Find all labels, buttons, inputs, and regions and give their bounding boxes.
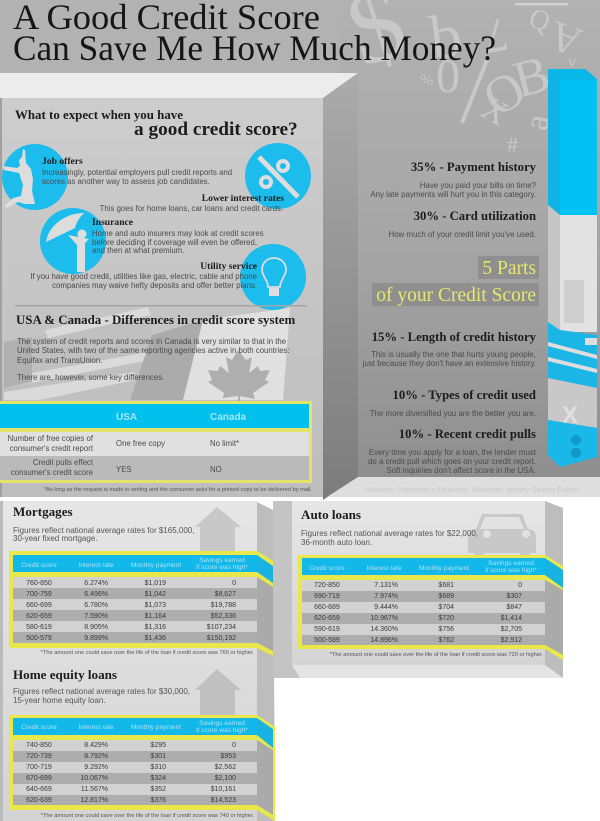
table: USA vs Canada: YES bbox=[116, 465, 132, 474]
text: 15 percent length of credit history: 15% - Length of credit history bbox=[372, 330, 537, 344]
table: mortgage rates: 620-659 bbox=[26, 613, 52, 620]
text: insurance: Home and auto insurers may look at credit scores bbox=[92, 229, 264, 238]
text: mortgages description: 30-year fixed mortgage. bbox=[13, 534, 98, 543]
table: mortgage rates: $1,436 bbox=[145, 635, 166, 642]
table: auto loan rates: Monthly payment bbox=[419, 565, 469, 572]
table: auto loan rates: $720 bbox=[438, 615, 454, 622]
table: auto loan rates: 620-659 bbox=[314, 615, 340, 622]
table: auto loan rates: 0 bbox=[518, 582, 522, 589]
table: auto loan rates: $847 bbox=[506, 604, 522, 611]
text: utility service bbox=[30, 261, 258, 290]
text: sources: Sources: Foreigner's Finances, Bankrate, Money Saving Expert bbox=[365, 485, 580, 494]
table: home equity rates: 700-719 bbox=[26, 764, 52, 771]
text: 10 percent types of credit used: The more diversified you are the better you are. bbox=[370, 409, 536, 418]
heading: what to expect: What to expect when you have bbox=[15, 108, 183, 122]
text: auto description: Figures reflect national average rates for $22,000, bbox=[301, 529, 478, 538]
panel: mortgages bbox=[9, 504, 275, 657]
text: 10 percent recent credit pulls: Soft inquiries don't affect score in the USA. bbox=[386, 466, 536, 475]
table: auto loan rates: $704 bbox=[438, 604, 454, 611]
text: utility service: companies may waive hefty deposits and offer better plans. bbox=[52, 281, 257, 290]
text: 35 percent payment history bbox=[370, 160, 537, 199]
table: home equity rates: 720-739 bbox=[26, 753, 52, 760]
table: home equity rates: $2,100 bbox=[215, 775, 236, 782]
table: home equity rates: 640-669 bbox=[26, 786, 52, 793]
text: insurance: and then at what premium. bbox=[92, 246, 184, 255]
table: auto loan rates: $1,414 bbox=[501, 615, 522, 622]
text: 35 percent payment history: Any late payments will hurt you in this category. bbox=[370, 190, 536, 199]
table: auto loan rates: 10.967% bbox=[370, 615, 398, 622]
table: home equity rates: Monthly payment bbox=[131, 724, 181, 731]
table: USA vs Canada: One free copy bbox=[116, 439, 165, 448]
table: home equity rates: 670-699 bbox=[26, 775, 52, 782]
table: USA vs Canada: USA bbox=[116, 412, 137, 423]
footnote: auto loans: *The amount one could save over the life of the loan if credit score was 720 or higher. bbox=[330, 652, 543, 658]
table: mortgage rates: $150,192 bbox=[207, 635, 236, 642]
table: USA vs Canada: consumer's credit score bbox=[11, 468, 93, 477]
decorative background letters: v bbox=[568, 54, 576, 71]
image: US flag bbox=[4, 307, 152, 400]
text: 10 percent recent credit pulls: 10% - Recent credit pulls bbox=[399, 427, 536, 441]
segment: 30 percent white bbox=[548, 205, 597, 332]
table: mortgage rates: 6.496% bbox=[84, 591, 108, 598]
table: mortgage rates: 660-699 bbox=[26, 602, 52, 609]
table: home equity rates: 10.067% bbox=[80, 775, 108, 782]
table: home equity rates: $10,161 bbox=[211, 786, 236, 793]
text: USA Canada intro: Equifax and TransUnion. bbox=[17, 356, 102, 365]
table: mortgage rates: Interest rate bbox=[78, 562, 114, 569]
table: home equity rates: if score was high* bbox=[196, 727, 248, 734]
heading: auto loans: Auto loans bbox=[301, 507, 361, 522]
table: USA vs Canada: Credit pulls effect bbox=[33, 458, 94, 467]
table: home equity rates: 8.792% bbox=[84, 753, 108, 760]
table: home equity rates: 8.429% bbox=[84, 742, 108, 749]
text: 15 percent length of credit history: just because they don't have an extensive history. bbox=[362, 359, 536, 368]
table: auto loan rates: 9.444% bbox=[374, 604, 398, 611]
table: auto loan rates: 690-719 bbox=[314, 593, 340, 600]
decorative background letters bbox=[333, 0, 588, 157]
table: auto loan rates: 7.131% bbox=[374, 582, 398, 589]
table: auto loan rates: $681 bbox=[438, 582, 454, 589]
text: home equity description: 15-year home equity loan. bbox=[13, 696, 106, 705]
text: 10 percent types of credit used bbox=[370, 388, 536, 418]
table: USA vs Canada: consumer's credit report bbox=[10, 444, 94, 453]
table: mortgage rates: $52,336 bbox=[211, 613, 236, 620]
table: mortgage rates: 500-579 bbox=[26, 635, 52, 642]
table: mortgage rates: $8,627 bbox=[215, 591, 236, 598]
panel: home equity loans bbox=[9, 667, 275, 821]
footnote: USA Canada table: *As long as the request is made in writing and the consumer asks for a printed copy to be delivered by mail. bbox=[44, 487, 312, 493]
table: auto loan rates: $689 bbox=[438, 593, 454, 600]
text: 10 percent recent credit pulls: Every time you apply for a loan, the lender must bbox=[369, 448, 537, 457]
segment: 10 percent types: X bbox=[562, 402, 578, 429]
text: job offers: scores as another way to assess job candidates. bbox=[42, 177, 210, 186]
decorative background letters: # bbox=[507, 132, 518, 157]
decorative background letters: Q bbox=[525, 2, 554, 38]
table: mortgage rates: $1,073 bbox=[145, 602, 166, 609]
footnote: mortgages: *The amount one could save over the life of the loan if credit score was 760 or higher. bbox=[41, 650, 254, 656]
table: mortgage rates: $1,316 bbox=[145, 624, 166, 631]
table: auto loan rates: 14.896% bbox=[370, 637, 398, 644]
decorative background letters: % bbox=[420, 72, 433, 89]
panel: auto loans bbox=[273, 501, 600, 821]
decorative background letters: b bbox=[426, 1, 466, 73]
text: utility service: Utility service bbox=[200, 261, 258, 272]
table: mortgage rates: 9.899% bbox=[84, 635, 108, 642]
text: lower interest rates bbox=[100, 193, 284, 213]
table: mortgage rates: $1,042 bbox=[145, 591, 166, 598]
table: home equity rates bbox=[9, 715, 275, 821]
heading: mortgages: Mortgages bbox=[13, 504, 73, 519]
text: USA Canada intro: There are, however, some key differences. bbox=[17, 373, 164, 382]
text: USA Canada intro bbox=[17, 337, 290, 382]
table: home equity rates: $301 bbox=[150, 753, 166, 760]
heading: 5 parts of your credit score bbox=[372, 256, 539, 306]
table: auto loan rates: 590-619 bbox=[314, 626, 340, 633]
table: mortgage rates: Monthly payment bbox=[131, 562, 181, 569]
text: 35 percent payment history: 35% - Payment history bbox=[411, 160, 537, 174]
panel: what to expect bbox=[0, 98, 323, 497]
table: USA vs Canada: Canada bbox=[210, 412, 247, 423]
table: auto loan rates: 720-850 bbox=[314, 582, 340, 589]
decorative background letters: X bbox=[475, 89, 514, 134]
text: 30 percent card utilization bbox=[388, 209, 536, 239]
footnote: home equity: *The amount one could save over the life of the loan if credit score was 740 or higher. bbox=[41, 813, 254, 819]
icon: percent bbox=[245, 143, 311, 209]
table: home equity rates: 12.817% bbox=[80, 797, 108, 804]
table: home equity rates: $324 bbox=[150, 775, 166, 782]
text: 10 percent recent credit pulls: do a credit pull which goes on your credit report. bbox=[368, 457, 536, 466]
table: mortgage rates: 760-850 bbox=[26, 580, 52, 587]
table: mortgage rates: 6.274% bbox=[84, 580, 108, 587]
decorative background letters: A bbox=[543, 11, 588, 65]
table: mortgage rates bbox=[9, 551, 275, 657]
table: home equity rates: $14,523 bbox=[211, 797, 236, 804]
table: home equity rates: Interest rate bbox=[78, 724, 114, 731]
text: home equity description bbox=[13, 687, 190, 705]
text: insurance bbox=[92, 217, 264, 255]
segment: 10 percent types bbox=[548, 378, 597, 429]
decorative background letters: O bbox=[474, 60, 535, 128]
decorative background letters: B bbox=[508, 45, 556, 109]
icon: insurance umbrella figure bbox=[40, 208, 106, 274]
background bbox=[0, 0, 600, 497]
table: auto loan rates: $756 bbox=[438, 626, 454, 633]
table: mortgage rates: $107,234 bbox=[207, 624, 236, 631]
table: auto loan rates: $307 bbox=[506, 593, 522, 600]
table: auto loan rates: $762 bbox=[438, 637, 454, 644]
text: utility service: If you have good credit, utilities like gas, electric, cable and phone bbox=[30, 272, 257, 281]
text: lower interest rates: This goes for home loans, car loans and credit cards. bbox=[100, 204, 283, 213]
icon: car bbox=[468, 514, 536, 560]
icon: house bbox=[195, 669, 241, 715]
table: auto loan rates: Credit score bbox=[309, 565, 345, 572]
table: home equity rates: Credit score bbox=[21, 724, 57, 731]
heading: what to expect bbox=[15, 108, 298, 140]
text: job offers: Increasingly, potential employers pull credit reports and bbox=[42, 168, 232, 177]
table: auto loan rates: 14.360% bbox=[370, 626, 398, 633]
table: home equity rates: 11.567% bbox=[81, 786, 108, 793]
text: 35 percent payment history: Have you paid your bills on time? bbox=[420, 181, 537, 190]
icon: house bbox=[195, 507, 241, 552]
table: mortgage rates: 8.905% bbox=[84, 624, 108, 631]
table: mortgage rates: 700-759 bbox=[26, 591, 52, 598]
table: mortgage rates: $19,788 bbox=[211, 602, 236, 609]
table: auto loan rates: $2,705 bbox=[501, 626, 522, 633]
text: job offers: Job offers bbox=[42, 156, 83, 167]
text: home equity description: Figures reflect national average rates for $30,000, bbox=[13, 687, 190, 696]
decorative background letters: 0 bbox=[436, 50, 460, 103]
table: auto loan rates: $2,912 bbox=[501, 637, 522, 644]
table: auto loan rates: Interest rate bbox=[366, 565, 402, 572]
table: USA vs Canada: NO bbox=[210, 465, 222, 474]
table: home equity rates: 0 bbox=[232, 742, 236, 749]
chart: 5 parts column bbox=[548, 69, 597, 467]
segment: 15 percent stripes bbox=[548, 322, 597, 388]
title bbox=[13, 0, 496, 68]
heading: home equity loans: Home equity loans bbox=[13, 667, 117, 682]
text: USA Canada intro: The system of credit reports and scores in Canada is very similar to that in the bbox=[17, 337, 286, 346]
text: auto description: 36-month auto loan. bbox=[301, 538, 372, 547]
table: auto loan rates: Savings earned bbox=[488, 560, 534, 567]
text: insurance: before deciding if coverage will even be offered, bbox=[92, 238, 257, 247]
heading: USA and Canada: USA & Canada - Differences in credit score system bbox=[16, 313, 296, 327]
title: Can Save Me How Much Money? bbox=[13, 28, 496, 68]
table: home equity rates: $352 bbox=[150, 786, 166, 793]
table: home equity rates: $295 bbox=[150, 742, 166, 749]
table: home equity rates: $376 bbox=[150, 797, 166, 804]
table: mortgage rates: 7.590% bbox=[84, 613, 108, 620]
table: mortgage rates: 6.780% bbox=[84, 602, 108, 609]
table: USA vs Canada bbox=[0, 401, 312, 483]
table: auto loan rates: 500-589 bbox=[314, 637, 340, 644]
table: mortgage rates: if score was high* bbox=[196, 564, 248, 571]
text: 30 percent card utilization: How much of your credit limit you've used. bbox=[388, 230, 536, 239]
table: auto loan rates: 7.974% bbox=[374, 593, 398, 600]
text: 10 percent types of credit used: 10% - Types of credit used bbox=[393, 388, 536, 402]
heading: 5 parts of your credit score: of your Credit Score bbox=[376, 285, 536, 306]
text: 10 percent recent credit pulls bbox=[368, 427, 537, 475]
text: 30 percent card utilization: 30% - Card utilization bbox=[414, 209, 536, 223]
table: USA vs Canada: Number of free copies of bbox=[8, 434, 94, 443]
table: mortgage rates: $1,164 bbox=[145, 613, 166, 620]
text: 15 percent length of credit history bbox=[362, 330, 537, 368]
text: lower interest rates: Lower interest rates bbox=[202, 193, 284, 204]
table: mortgage rates: Savings earned bbox=[199, 557, 245, 564]
heading: 5 parts of your credit score: 5 Parts bbox=[482, 258, 536, 279]
icon: utility light bulb bbox=[240, 244, 306, 310]
text: insurance: Insurance bbox=[92, 217, 134, 228]
table: mortgage rates: $1,019 bbox=[145, 580, 166, 587]
table: auto loan rates: if score was high* bbox=[485, 567, 537, 574]
table: auto loan rates: 660-689 bbox=[314, 604, 340, 611]
text: job offers bbox=[42, 156, 232, 186]
image: Canadian flag bbox=[130, 308, 290, 402]
table: home equity rates: $2,562 bbox=[215, 764, 236, 771]
text: 15 percent length of credit history: This is usually the one that hurts young people, bbox=[371, 350, 536, 359]
decorative background letters: 7 bbox=[479, 7, 512, 64]
decorative background letters: a bbox=[518, 112, 557, 133]
panel: mortgages and home equity background bbox=[0, 501, 275, 821]
text: USA Canada intro: United States, with two of the same reporting agencies active in both countries: bbox=[17, 346, 290, 355]
segment: 10 percent recent bbox=[548, 420, 597, 467]
table: home equity rates: $310 bbox=[150, 764, 166, 771]
table: auto loan rates bbox=[298, 555, 563, 660]
table: USA vs Canada: No limit* bbox=[210, 439, 239, 448]
table: mortgage rates: 580-619 bbox=[26, 624, 52, 631]
segment: 35 percent blue bbox=[548, 69, 597, 215]
text: mortgages description bbox=[13, 526, 194, 543]
heading: what to expect: a good credit score? bbox=[134, 119, 298, 140]
text: auto description bbox=[301, 529, 478, 547]
table: mortgage rates: Credit score bbox=[21, 562, 57, 569]
table: home equity rates: $953 bbox=[220, 753, 236, 760]
text: mortgages description: Figures reflect national average rates for $165,000, bbox=[13, 526, 194, 535]
table: home equity rates: 9.292% bbox=[84, 764, 108, 771]
table: mortgage rates: 0 bbox=[232, 580, 236, 587]
icon: job offers jumping figure bbox=[2, 144, 68, 210]
panel: box walls bbox=[0, 73, 600, 500]
table: home equity rates: 740-850 bbox=[26, 742, 52, 749]
table: home equity rates: Savings earned bbox=[199, 720, 245, 727]
table: home equity rates: 620-639 bbox=[26, 797, 52, 804]
